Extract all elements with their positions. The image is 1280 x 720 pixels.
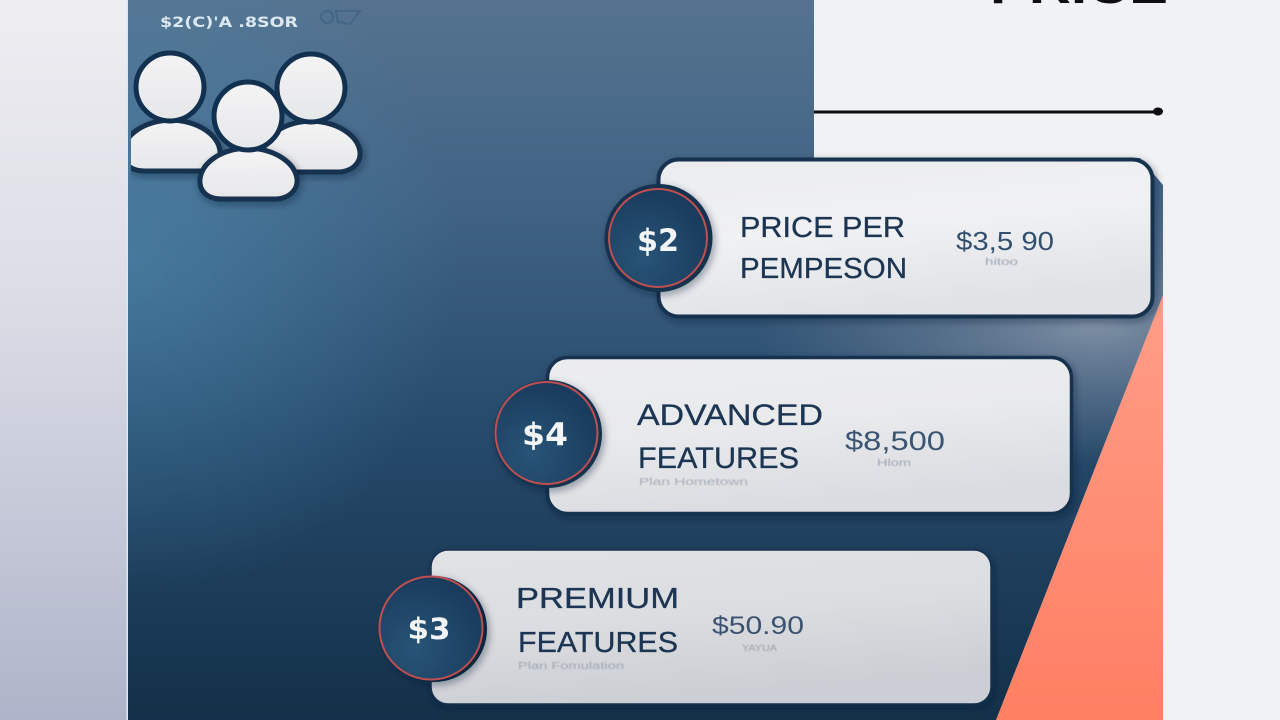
divider line with end dot <box>814 108 1163 116</box>
label: premium features: PREMIUM <box>516 583 679 615</box>
icon: left person <box>123 53 220 171</box>
badge: $4 <box>494 380 602 488</box>
caption: plan: Hlom <box>877 458 911 469</box>
panel: advanced features card <box>494 358 1072 514</box>
label: price per person: PEMPESON <box>740 253 907 285</box>
badge: $4: $4 <box>522 417 568 453</box>
icon: center person <box>200 82 297 199</box>
badge: $3 <box>380 576 487 682</box>
caption: plan description: Plan Fomulation <box>518 661 624 672</box>
label: premium features: FEATURES <box>518 627 678 659</box>
price: $3,5 90: $3,5 90 <box>956 226 1054 256</box>
label: price per person <box>740 212 907 285</box>
icon: right person <box>263 54 360 172</box>
header small code text: $2(C)'A .8SOR <box>160 15 298 31</box>
icon: group of three people <box>123 53 360 199</box>
background: left margin <box>0 0 128 720</box>
label: advanced features: ADVANCED <box>637 399 823 432</box>
badge: $2: $2 <box>637 223 679 259</box>
label: price per person: PRICE PER <box>740 212 905 244</box>
caption: plan description: Plan Hometown <box>639 477 748 488</box>
label: premium features <box>516 583 679 659</box>
price: $50.90: $50.90 <box>712 612 804 640</box>
caption: per person: hitoo <box>985 257 1019 268</box>
coral triangle <box>996 295 1163 720</box>
label: advanced features <box>637 399 823 475</box>
icon: faint logo <box>321 11 360 24</box>
panel: price per person card <box>604 160 1152 316</box>
panel: premium features card <box>380 550 991 704</box>
price: $8,500: $8,500 <box>845 426 945 456</box>
caption: value: YAYUA <box>742 643 777 653</box>
badge: $3: $3 <box>408 612 450 646</box>
badge: $2 <box>604 184 712 292</box>
background: right area <box>814 0 1280 720</box>
label: advanced features: FEATURES <box>638 442 799 475</box>
